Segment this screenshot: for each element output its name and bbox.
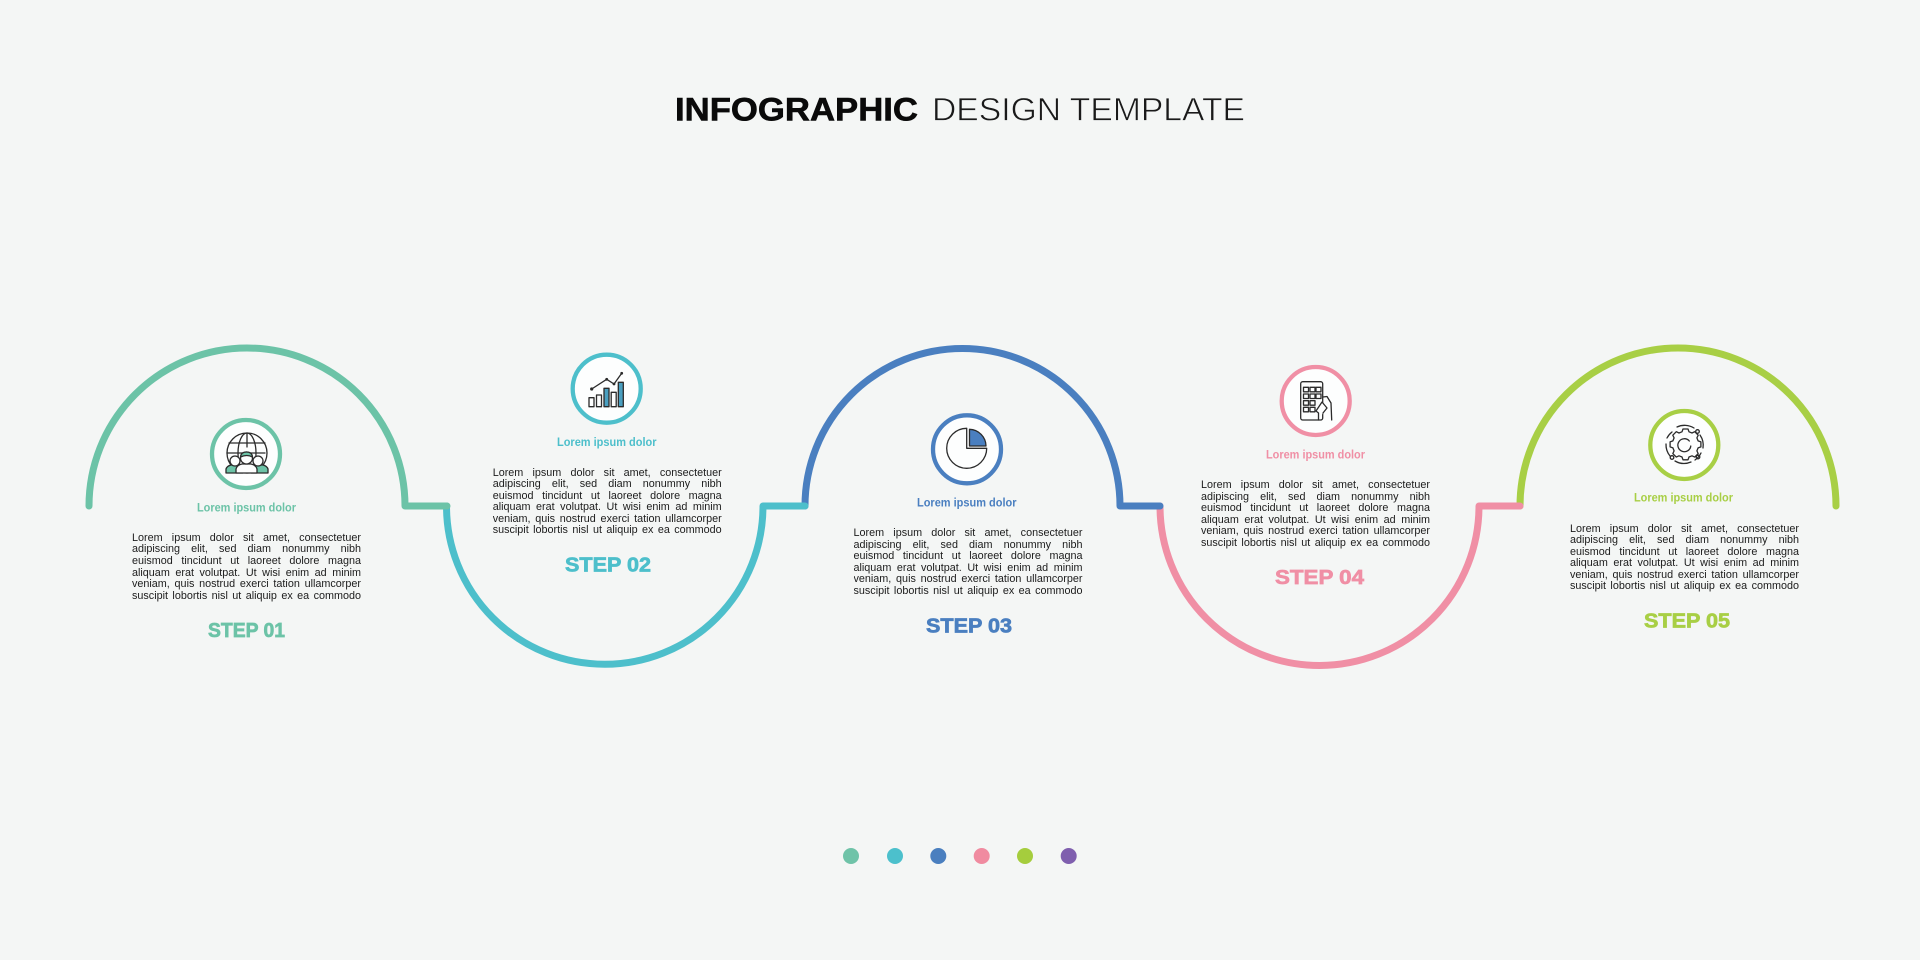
- body text: [493, 468, 725, 540]
- step label: STEP 03: [926, 615, 1012, 637]
- icon: pie chart: [933, 415, 1001, 483]
- body text: aliquam erat volutpat. Ut wisi enim ad minim: [1201, 514, 1430, 526]
- step 01 panel: [132, 420, 364, 642]
- body text: veniam, quis nostrud exerci tation ullamcorper: [854, 573, 1082, 585]
- body text: adipiscing elit, sed diam nonummy nibh: [1201, 491, 1430, 503]
- step 03 arc and connector: [805, 348, 1160, 506]
- body text: euismod tincidunt ut laoreet dolore magna: [1201, 502, 1430, 514]
- body text: [1201, 480, 1433, 552]
- colour dots legend: [843, 848, 1077, 864]
- body text: euismod tincidunt ut laoreet dolore magna: [1570, 546, 1799, 558]
- body text: veniam, quis nostrud exerci tation ullamcorper: [1570, 569, 1799, 581]
- step label: STEP 04: [1275, 567, 1365, 589]
- body text: euismod tincidunt ut laoreet dolore magna: [493, 490, 722, 502]
- body text: aliquam erat volutpat. Ut wisi enim ad minim: [493, 501, 722, 513]
- icon: globe with people: [212, 420, 280, 488]
- step label: STEP 02: [565, 555, 651, 577]
- step 05 arc: [1520, 348, 1836, 506]
- step 04 arc and connector: [1160, 506, 1520, 666]
- body text: veniam, quis nostrud exerci tation ullamcorper: [1201, 525, 1430, 537]
- body text: veniam, quis nostrud exerci tation ullamcorper: [493, 513, 722, 525]
- body text: veniam, quis nostrud exerci tation ullamcorper: [132, 578, 361, 590]
- title: [675, 92, 1245, 128]
- label: Lorem ipsum dolor: [557, 437, 657, 449]
- step 05 panel: [1570, 411, 1802, 633]
- step 01 arc and connector: [89, 348, 447, 506]
- label: Lorem ipsum dolor: [1634, 492, 1733, 504]
- label: Lorem ipsum dolor: [1266, 450, 1365, 462]
- step 03 panel: [854, 415, 1086, 637]
- body text: [854, 528, 1086, 600]
- step 02 arc and connector: [446, 506, 805, 664]
- body text: suscipit lobortis nisl ut aliquip ex ea commodo: [1570, 580, 1799, 592]
- title: INFOGRAPHIC: [675, 92, 918, 128]
- body text: suscipit lobortis nisl ut aliquip ex ea commodo: [854, 585, 1082, 597]
- body text: adipiscing elit, sed diam nonummy nibh: [493, 478, 722, 490]
- body text: aliquam erat volutpat. Ut wisi enim ad minim: [132, 567, 361, 579]
- icon: bar chart with trend line: [573, 355, 641, 423]
- body text: adipiscing elit, sed diam nonummy nibh: [1570, 534, 1799, 546]
- label: Lorem ipsum dolor: [917, 498, 1017, 510]
- body text: [1570, 524, 1802, 596]
- body text: euismod tincidunt ut laoreet dolore magna: [132, 555, 361, 567]
- body text: [132, 533, 364, 605]
- body text: adipiscing elit, sed diam nonummy nibh: [132, 543, 361, 555]
- step 02 panel: [493, 355, 725, 577]
- step label: STEP 05: [1644, 611, 1730, 633]
- body text: adipiscing elit, sed diam nonummy nibh: [854, 539, 1082, 551]
- step label: STEP 01: [208, 620, 285, 642]
- body text: suscipit lobortis nisl ut aliquip ex ea commodo: [1201, 537, 1430, 549]
- body text: suscipit lobortis nisl ut aliquip ex ea commodo: [132, 590, 361, 602]
- title: DESIGN TEMPLATE: [932, 92, 1245, 128]
- icon: hand holding phone: [1282, 367, 1350, 435]
- body text: suscipit lobortis nisl ut aliquip ex ea commodo: [493, 524, 722, 536]
- step 04 panel: [1201, 367, 1433, 589]
- body text: aliquam erat volutpat. Ut wisi enim ad minim: [854, 562, 1082, 574]
- label: Lorem ipsum dolor: [197, 502, 296, 514]
- body text: euismod tincidunt ut laoreet dolore magna: [854, 550, 1082, 562]
- body text: aliquam erat volutpat. Ut wisi enim ad minim: [1570, 557, 1799, 569]
- icon: gear with orbit: [1650, 411, 1718, 479]
